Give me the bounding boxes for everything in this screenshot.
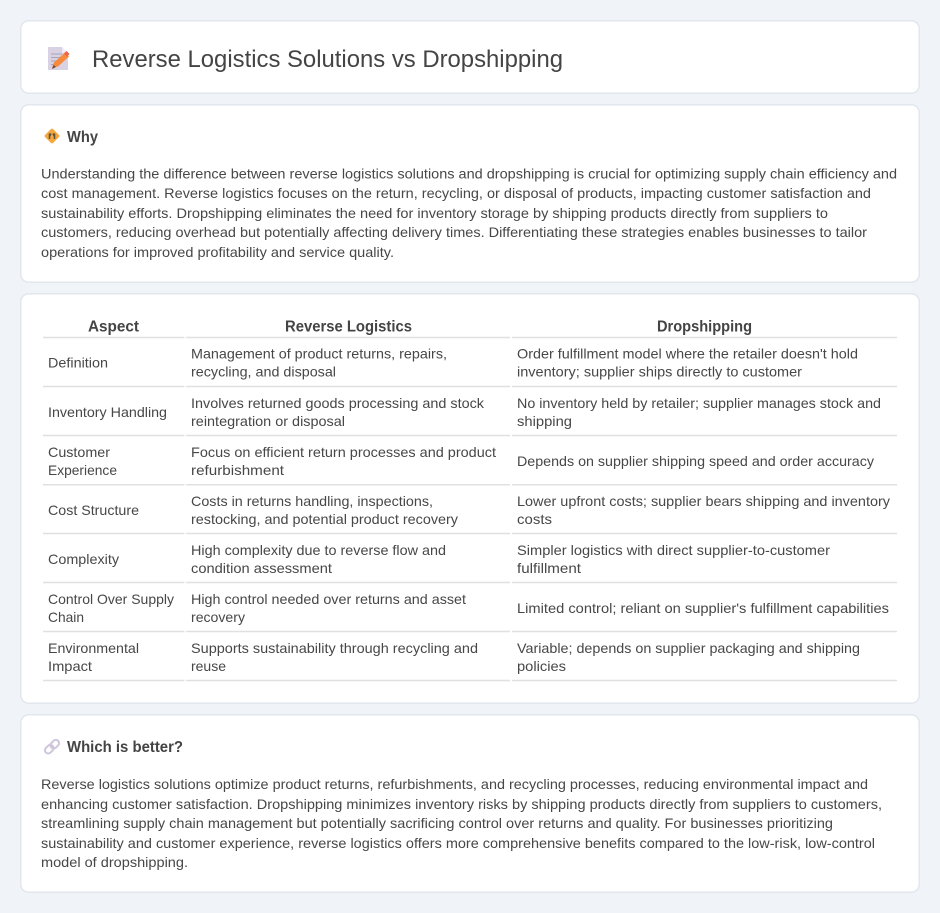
table row: customer experience: Experience <box>48 462 117 478</box>
table row: environmental impact: Supports sustainability through recycling and <box>191 640 478 656</box>
table row: complexity: High complexity due to reverse flow and <box>191 542 446 558</box>
table row: definition: Order fulfillment model where the retailer doesn't hold <box>517 346 858 362</box>
text block: which is better paragraph <box>41 776 882 870</box>
table row: environmental impact: Variable; depends on supplier packaging and shipping <box>517 640 860 656</box>
table row: control over supply chain: recovery <box>191 609 245 625</box>
table row: environmental impact: policies <box>517 658 566 674</box>
table row: inventory handling: shipping <box>517 413 572 429</box>
table row: cost structure: Costs in returns handling, inspections, <box>191 493 433 509</box>
table row: complexity <box>43 542 897 582</box>
text block: why paragraph: cost management. Reverse logistics focuses on the return, recycling, or disposal of products, impacting customer satisfaction and <box>41 185 871 201</box>
panel: which is better <box>21 715 919 892</box>
heading: why: Why <box>67 129 98 146</box>
table row: definition: inventory; supplier ships directly to customer <box>517 364 802 380</box>
text block: which is better paragraph: model of dropshipping. <box>41 854 188 870</box>
text block: why paragraph: sustainability efforts. Dropshipping eliminates the need for inventory storage by shipping products directly from suppliers to <box>41 205 828 221</box>
text block: which is better paragraph: streamlining supply chain management but potentially sacrificing control over returns and quality. For businesses prioritizing <box>41 815 833 831</box>
table row: definition <box>43 346 897 386</box>
table row: inventory handling: No inventory held by retailer; supplier manages stock and <box>517 395 881 411</box>
table header row: Aspect <box>88 318 140 336</box>
table header row <box>43 318 897 338</box>
text block: which is better paragraph: enhancing customer satisfaction. Dropshipping minimizes inventory risks by shipping products directly from suppliers to customers, <box>41 796 882 812</box>
text block: why paragraph: operations for improved profitability and service quality. <box>41 244 394 260</box>
icon: memo with pencil <box>48 47 70 70</box>
panel: title header <box>21 21 919 93</box>
table row: inventory handling: Involves returned goods processing and stock <box>191 395 485 411</box>
table row: control over supply chain: High control needed over returns and asset <box>191 591 466 607</box>
table row: definition: Management of product returns, repairs, <box>191 346 447 362</box>
text block: why paragraph: Understanding the difference between reverse logistics solutions and dropshipping is crucial for optimizing supply chain efficiency and <box>41 166 897 182</box>
table row: customer experience: refurbishment <box>191 462 284 478</box>
table row: customer experience: Customer <box>48 444 110 460</box>
table row: complexity: Complexity <box>48 551 119 567</box>
panel: comparison table <box>21 294 919 703</box>
text block: which is better paragraph: sustainability and customer experience, reverse logistics offers more comprehensive benefits compared to the low-risk, low-control <box>41 835 875 851</box>
table row: inventory handling: Inventory Handling <box>48 404 167 420</box>
table row: control over supply chain: Limited control; reliant on supplier's fulfillment capabilities <box>517 600 889 616</box>
table row: inventory handling: reintegration or disposal <box>191 413 345 429</box>
table row: definition: recycling, and disposal <box>191 364 336 380</box>
table row: cost structure: Lower upfront costs; supplier bears shipping and inventory <box>517 493 890 509</box>
table row: complexity: Simpler logistics with direct supplier-to-customer <box>517 542 830 558</box>
table row: control over supply chain <box>43 591 897 632</box>
icon: chain link <box>44 739 60 755</box>
table row: complexity: fulfillment <box>517 560 581 576</box>
table row: cost structure: restocking, and potential product recovery <box>191 511 458 527</box>
table row: complexity: condition assessment <box>191 560 332 576</box>
table header row: Reverse Logistics <box>285 318 412 336</box>
heading: which is better: Which is better? <box>67 739 183 756</box>
table row: customer experience: Focus on efficient return processes and product <box>191 444 496 460</box>
text block: why paragraph <box>41 166 897 260</box>
table row: environmental impact: Environmental <box>48 640 139 656</box>
table row: control over supply chain: Chain <box>48 609 84 625</box>
panel: why <box>21 105 919 282</box>
table row: environmental impact <box>43 640 897 680</box>
table row: customer experience <box>43 444 897 485</box>
table row: cost structure <box>43 493 897 534</box>
table row: inventory handling <box>43 395 897 436</box>
table row: environmental impact: reuse <box>191 658 226 674</box>
table row: cost structure: Cost Structure <box>48 502 139 518</box>
icon: warning diamond with figures <box>44 128 60 144</box>
table row: customer experience: Depends on supplier shipping speed and order accuracy <box>517 453 874 469</box>
table row: environmental impact: Impact <box>48 658 92 674</box>
text block: why paragraph: customers, reducing overhead but potentially affecting delivery times. Differentiating these strategies enables businesses to tailor <box>41 224 867 240</box>
table row: control over supply chain: Control Over Supply <box>48 591 174 607</box>
table row: definition: Definition <box>48 355 108 371</box>
text block: which is better paragraph: Reverse logistics solutions optimize product returns, refurbishments, and recycling processes, reducing environmental impact and <box>41 776 868 792</box>
title: Reverse Logistics Solutions vs Dropshipping <box>92 46 563 73</box>
table header row: Dropshipping <box>657 318 752 336</box>
table row: cost structure: costs <box>517 511 552 527</box>
